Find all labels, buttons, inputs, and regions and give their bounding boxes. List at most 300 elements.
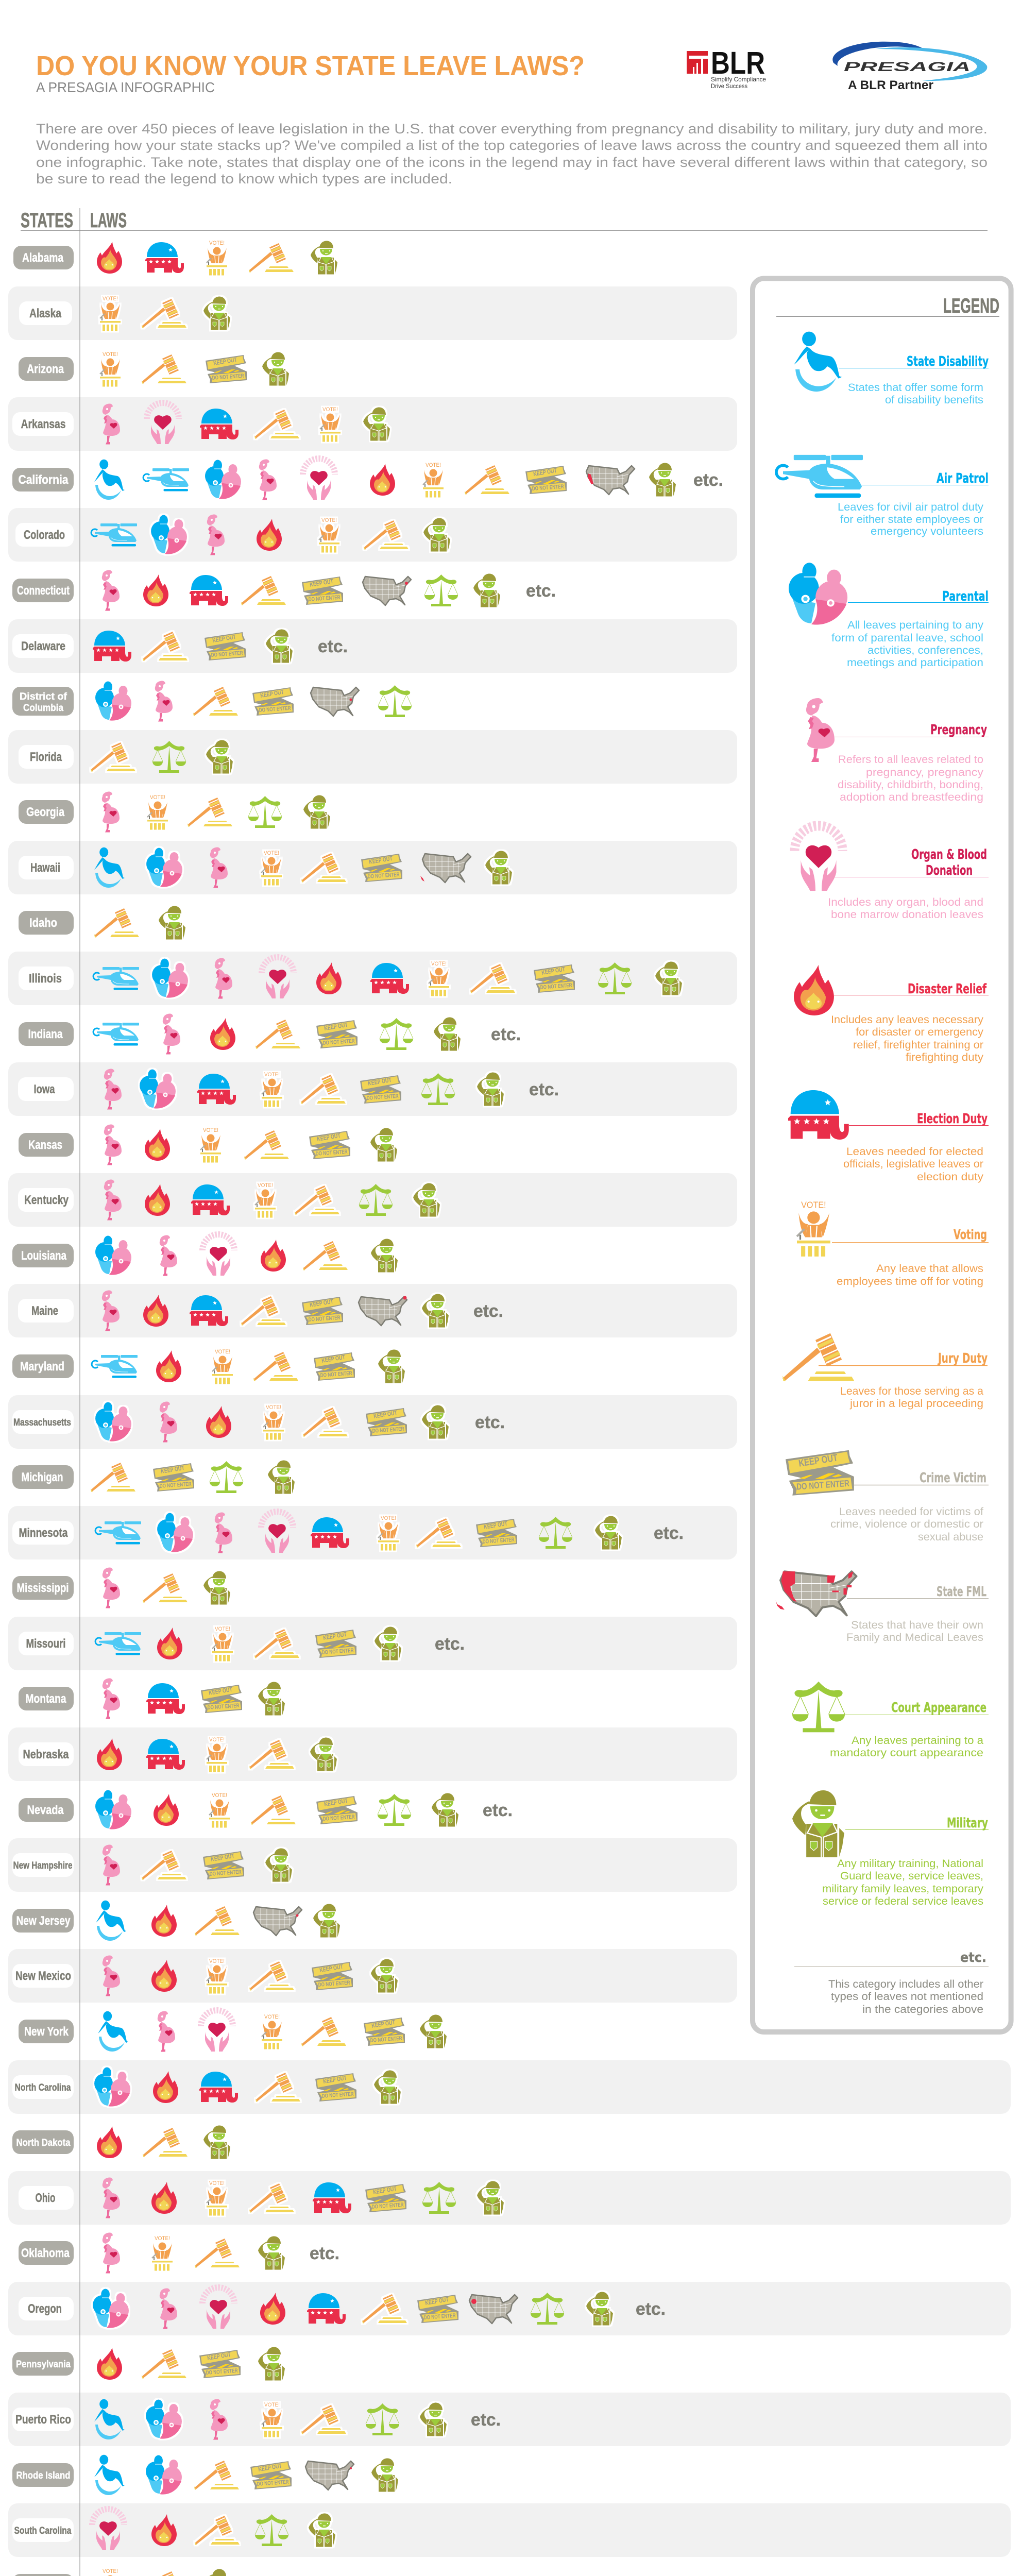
icon: parental xyxy=(146,2455,182,2495)
icon: state map xyxy=(305,2461,354,2490)
state label xyxy=(19,1798,74,1822)
state label xyxy=(18,1188,74,1212)
etc label: etc. xyxy=(318,637,348,656)
icon: voting xyxy=(100,296,121,331)
state label: North Dakota xyxy=(16,2138,71,2148)
row: Kentucky xyxy=(8,1173,737,1227)
state label: Missouri xyxy=(26,1637,66,1651)
icon: voting xyxy=(207,1737,227,1772)
description: types of leaves not mentioned xyxy=(831,1991,983,2003)
icon: military xyxy=(203,2126,230,2159)
icon: parental xyxy=(152,958,188,998)
icon: court xyxy=(422,2182,456,2214)
icon: jury xyxy=(91,1463,135,1492)
row: Oregon xyxy=(8,2282,1011,2335)
description: adoption and breastfeeding xyxy=(840,791,983,803)
icon: fire xyxy=(257,519,282,551)
state label xyxy=(12,2130,74,2154)
icon: crime xyxy=(250,2461,292,2489)
icon: fire xyxy=(151,2182,177,2214)
icon: fire xyxy=(261,1240,286,1272)
state label xyxy=(19,967,74,990)
icon: crime xyxy=(201,1685,242,1713)
state label xyxy=(19,357,74,381)
icon: jury xyxy=(142,2571,186,2576)
legend entry: Air Patrol xyxy=(776,455,989,537)
icon: military xyxy=(309,2513,335,2547)
state label: New Mexico xyxy=(15,1969,71,1983)
icon: jury xyxy=(143,1573,188,1602)
icon: military xyxy=(370,1128,397,1161)
state label: Oklahoma xyxy=(21,2246,70,2260)
icon: voting xyxy=(263,1404,284,1439)
icon: parental xyxy=(157,1513,193,1552)
description: for disaster or emergency xyxy=(856,1026,984,1038)
icon: military xyxy=(374,2070,401,2104)
state label: New Hampshire xyxy=(13,1860,72,1871)
icon: jury xyxy=(142,354,186,383)
state label: Minnesota xyxy=(19,1526,68,1540)
description xyxy=(830,1506,983,1543)
icon: voting xyxy=(423,462,444,498)
icon: military xyxy=(378,1350,405,1383)
description: Includes any leaves necessary xyxy=(831,1014,984,1026)
state label: Illinois xyxy=(29,972,62,986)
row: Delaware xyxy=(8,619,737,673)
state label xyxy=(12,1853,74,1877)
icon: military xyxy=(434,1017,461,1051)
icon: crime tape xyxy=(786,1450,854,1496)
icon: election xyxy=(199,2072,238,2103)
icon: air patrol xyxy=(143,468,189,492)
icon: crime xyxy=(365,2184,406,2212)
icon: crime xyxy=(302,1297,343,1325)
icon: voter at podium xyxy=(797,1199,830,1257)
intro paragraph: one infographic. Take note, states that display one of the icons in the legend may in fact have several different laws within that category, so xyxy=(36,155,988,170)
row: Hawaii xyxy=(8,841,737,894)
legend entry: Court Appearance xyxy=(792,1682,989,1759)
description: Guard leave, service leaves, xyxy=(840,1870,983,1882)
heading: State FML xyxy=(937,1584,986,1600)
state label: Alaska xyxy=(29,307,62,320)
state label xyxy=(12,1576,74,1600)
icon: pregnancy xyxy=(102,570,120,611)
icon: election xyxy=(145,242,184,273)
icon: pregnancy xyxy=(160,2289,177,2329)
description xyxy=(822,1858,984,1907)
icon: pregnancy xyxy=(160,1235,177,1276)
icon: military xyxy=(159,906,185,940)
icon: crime xyxy=(525,466,567,494)
icon: court xyxy=(378,685,412,717)
etc label: etc. xyxy=(483,1801,513,1820)
icon: military xyxy=(313,1904,340,1937)
icon: military xyxy=(473,574,500,607)
icon: disability xyxy=(98,2011,128,2052)
icon: pregnancy xyxy=(215,1513,232,1553)
row: Maryland xyxy=(12,1349,405,1384)
description: Leaves needed for elected xyxy=(846,1146,983,1158)
icon: fire xyxy=(370,464,395,496)
row: New Hampshire xyxy=(8,1838,737,1892)
icon: election xyxy=(191,1184,230,1215)
icon: parental xyxy=(95,681,131,721)
icon: parental xyxy=(95,1790,131,1829)
icon: military xyxy=(203,2569,230,2576)
description xyxy=(838,501,984,537)
icon: pregnancy xyxy=(102,791,120,833)
state label: Indiana xyxy=(28,1027,63,1041)
icon: heart in hands xyxy=(794,826,843,891)
description: employees time off for voting xyxy=(837,1276,983,1287)
row: Kansas xyxy=(19,1124,397,1165)
heading: Air Patrol xyxy=(937,471,989,486)
icon: US map xyxy=(776,1571,857,1616)
icon: election xyxy=(146,1683,185,1714)
icon: fire xyxy=(153,2071,178,2103)
description: meetings and participation xyxy=(847,657,983,669)
etc label: etc. xyxy=(471,2410,501,2430)
icon: military xyxy=(375,1627,401,1660)
row: South Dakota xyxy=(12,2568,287,2576)
icon: jury xyxy=(249,243,294,272)
state label xyxy=(19,800,74,824)
icon: crime xyxy=(199,2350,241,2378)
icon: state map xyxy=(586,466,635,495)
icon: military xyxy=(206,740,233,774)
state label: Kansas xyxy=(28,1138,62,1152)
icon: pregnancy xyxy=(158,2011,175,2052)
icon: court xyxy=(598,962,632,994)
state label xyxy=(12,1465,74,1489)
logo: Presagia: A BLR Partner xyxy=(848,78,933,92)
icon: pregnancy xyxy=(160,1401,177,1443)
icon: jury xyxy=(364,520,409,549)
description xyxy=(846,1619,983,1643)
icon: organ xyxy=(202,2287,234,2329)
icon: voting xyxy=(212,1626,233,1661)
icon: election xyxy=(313,2182,351,2213)
state label xyxy=(12,412,74,436)
icon: fire xyxy=(97,2126,122,2158)
description: Leaves for those serving as a xyxy=(840,1385,983,1397)
icon: voting xyxy=(320,406,341,442)
etc label: etc. xyxy=(693,470,723,490)
icon: pregnancy xyxy=(103,1567,120,1608)
icon: fire xyxy=(154,1794,179,1826)
description: officials, legislative leaves or xyxy=(843,1158,983,1170)
etc label: etc. xyxy=(636,2299,666,2319)
state label xyxy=(12,2352,74,2376)
icon: court xyxy=(359,1184,393,1216)
row: Arizona xyxy=(19,351,289,386)
icon: jury xyxy=(303,1408,348,1436)
icon: jury xyxy=(142,299,186,328)
intro paragraph xyxy=(36,121,988,187)
row: Missouri xyxy=(8,1617,737,1670)
state label: Mississippi xyxy=(16,1581,69,1595)
icon: military xyxy=(586,2292,613,2326)
icon: fire xyxy=(157,1628,182,1659)
icon: disability xyxy=(94,2399,125,2439)
row: Nebraska xyxy=(8,1727,737,1781)
icon: air patrol xyxy=(91,523,137,546)
state label xyxy=(12,1244,74,1267)
icon: court xyxy=(531,2293,564,2325)
description: pregnancy, pregnancy xyxy=(866,767,984,778)
legend entry: Parental xyxy=(789,563,989,669)
icon: election xyxy=(197,1074,236,1105)
description xyxy=(828,896,983,921)
state label xyxy=(19,856,74,879)
icon: voting xyxy=(261,850,282,885)
row: Colorado xyxy=(8,508,737,562)
state label xyxy=(19,2020,74,2043)
heading: Organ & Blood xyxy=(911,847,987,862)
icon: helicopter xyxy=(776,455,863,498)
icon: jury xyxy=(195,2239,240,2268)
state label: North Carolina xyxy=(14,2082,71,2093)
logo: Presagia: PRESAGIA xyxy=(844,60,971,74)
state label: Arizona xyxy=(27,362,64,376)
icon: jury xyxy=(254,1629,299,1658)
description: service or federal service leaves xyxy=(823,1895,983,1907)
heading: Jury Duty xyxy=(938,1351,988,1366)
icon: voting xyxy=(100,2568,121,2576)
row: District of Columbia xyxy=(12,681,412,721)
icon: military xyxy=(268,1460,295,1494)
state label xyxy=(12,2574,74,2576)
etc label: etc. xyxy=(310,2244,339,2263)
icon: court xyxy=(424,574,458,606)
row: Montana xyxy=(19,1679,285,1719)
legend entry: Military xyxy=(792,1790,989,1907)
state label xyxy=(19,2186,74,2210)
icon: parental xyxy=(95,1235,131,1275)
icon: military xyxy=(303,795,330,828)
icon: jury xyxy=(256,2073,300,2102)
description: Family and Medical Leaves xyxy=(846,1632,983,1643)
icon: voting xyxy=(200,1127,221,1162)
icon: jury xyxy=(301,853,346,882)
icon: organ xyxy=(261,1512,293,1553)
icon: court xyxy=(255,2514,288,2546)
heading: Disaster Relief xyxy=(908,981,986,997)
icon: jury xyxy=(256,1020,300,1049)
state label xyxy=(19,1742,74,1766)
icon: disability xyxy=(94,848,125,888)
state label: Puerto Rico xyxy=(15,2413,71,2427)
description: juror in a legal proceeding xyxy=(849,1398,983,1410)
icon: crime xyxy=(252,687,294,716)
state label: Oregon xyxy=(28,2302,62,2316)
icon: gavel xyxy=(782,1333,854,1381)
icon: voting xyxy=(319,517,339,552)
icon: military xyxy=(420,2014,447,2048)
icon: jury xyxy=(142,2349,186,2378)
icon: organ xyxy=(303,459,335,500)
state label xyxy=(12,2518,74,2542)
icon: crime xyxy=(534,964,575,993)
icon: jury xyxy=(416,1518,461,1548)
icon: military xyxy=(422,1294,449,1327)
icon: voting xyxy=(255,1182,276,1218)
icon: military xyxy=(371,1239,398,1273)
icon: crime xyxy=(302,577,343,605)
icon: air patrol xyxy=(93,1023,139,1046)
intro paragraph: There are over 450 pieces of leave legislation in the U.S. that cover everything from pregnancy and disability to military, jury duty and more. xyxy=(36,121,988,137)
icon: military xyxy=(266,630,293,663)
row: Alaska xyxy=(8,286,737,340)
row: South Carolina xyxy=(8,2503,1011,2557)
icon: state map xyxy=(253,1907,302,1936)
state label: Pennsylvania xyxy=(16,2359,71,2370)
row: Florida xyxy=(8,730,737,784)
state label: Louisiana xyxy=(21,1249,67,1263)
description: Any military training, National xyxy=(837,1858,983,1870)
icon: military xyxy=(311,241,337,274)
description: form of parental leave, school xyxy=(831,632,983,644)
row: Mississippi xyxy=(12,1567,230,1608)
row: Georgia xyxy=(19,791,330,833)
state label: Kentucky xyxy=(24,1193,69,1207)
icon: state map xyxy=(363,577,411,605)
icon: pregnancy xyxy=(104,1180,122,1220)
icon: jury xyxy=(465,465,509,495)
icon: pregnancy xyxy=(155,681,173,721)
icon: pregnancy xyxy=(104,1124,122,1165)
icon: jury xyxy=(254,410,299,439)
icon: pregnancy xyxy=(210,2399,228,2440)
state label xyxy=(12,2463,74,2487)
state label xyxy=(12,634,74,658)
icon: military xyxy=(477,1073,504,1106)
icon: pregnancy xyxy=(103,2233,120,2273)
icon: elephant xyxy=(788,1090,849,1140)
icon: parental xyxy=(94,2067,130,2107)
icon: voting xyxy=(207,2180,227,2215)
row: Connecticut xyxy=(12,570,556,611)
icon: soldier xyxy=(792,1790,844,1857)
heading: Pregnancy xyxy=(930,722,987,738)
state label: New Jersey xyxy=(16,1914,71,1928)
icon: jury xyxy=(301,2017,346,2046)
heading: Crime Victim xyxy=(920,1470,986,1486)
icon: parental xyxy=(205,460,241,499)
icon: military xyxy=(203,1571,230,1604)
legend entry: State Disability xyxy=(794,332,989,406)
icon: court xyxy=(210,1461,243,1493)
etc label: etc. xyxy=(475,1413,505,1432)
description xyxy=(831,1014,984,1063)
icon: jury xyxy=(94,908,139,938)
intro paragraph: Wondering how your state stacks up? We've compiled a list of the top categories of leave laws across the country and squeezed them all into xyxy=(36,138,988,153)
icon: disability xyxy=(96,1901,126,1941)
icon: election xyxy=(93,631,131,662)
icon: military xyxy=(422,1405,449,1438)
icon: crime xyxy=(203,1851,244,1879)
panel: legend xyxy=(753,278,1011,2032)
icon: pregnancy xyxy=(210,847,228,888)
icon: military xyxy=(203,297,230,330)
icon: military xyxy=(310,1737,337,1771)
icon: voting xyxy=(262,1072,282,1107)
description: relief, firefighter training or xyxy=(853,1039,983,1051)
column heading: laws: LAWS xyxy=(90,209,127,232)
state label xyxy=(12,1964,74,1988)
icon: crime xyxy=(366,1408,407,1436)
state label xyxy=(12,1410,74,1434)
state label: Connecticut xyxy=(17,584,70,598)
icon: crime xyxy=(206,355,247,383)
icon: jury xyxy=(303,1241,348,1270)
row: Oklahoma xyxy=(19,2233,339,2273)
state label xyxy=(12,1354,74,1378)
state label xyxy=(19,2297,74,2320)
icon: military xyxy=(423,518,450,551)
state label: Michigan xyxy=(22,1470,63,1484)
icon: court xyxy=(539,1517,572,1549)
description: of disability benefits xyxy=(885,394,983,406)
subtitle: A PRESAGIA INFOGRAPHIC xyxy=(36,79,215,95)
state label: Georgia xyxy=(26,805,65,819)
legend entry: Jury Duty xyxy=(782,1333,988,1410)
row: Arkansas xyxy=(8,397,737,451)
description xyxy=(828,1978,983,2015)
icon: jury xyxy=(362,2294,407,2324)
description: firefighting duty xyxy=(906,1052,984,1063)
icon: air patrol xyxy=(92,1355,138,1378)
icon: pregnant woman xyxy=(806,698,835,762)
state label xyxy=(19,1022,74,1046)
description: mandatory court appearance xyxy=(830,1747,983,1759)
icon: air patrol xyxy=(95,1632,141,1655)
icon: parental xyxy=(95,1402,131,1442)
state label xyxy=(18,1077,74,1101)
state label xyxy=(19,1133,74,1157)
description xyxy=(848,382,983,406)
icon: fire xyxy=(151,2514,177,2546)
state label xyxy=(12,2075,74,2099)
state label: Alabama xyxy=(22,251,64,265)
state label xyxy=(19,1687,74,1710)
icon: court xyxy=(421,1073,455,1105)
icon: disability xyxy=(94,2455,125,2495)
icon: fire xyxy=(210,1018,235,1050)
icon: military xyxy=(262,352,289,385)
icon: voting xyxy=(429,961,449,996)
icon: disability xyxy=(94,460,125,500)
description: Leaves needed for victims of xyxy=(839,1506,983,1518)
icon: crime xyxy=(361,854,402,882)
heading: etc. xyxy=(960,1950,986,1965)
icon: election xyxy=(311,1517,349,1548)
icon: organ xyxy=(92,2509,124,2550)
icon: fire xyxy=(143,574,168,606)
row: New Jersey xyxy=(12,1901,340,1941)
legend entry: Election Duty xyxy=(788,1090,989,1183)
icon: parental xyxy=(146,2400,182,2439)
legend entry: Crime Victim xyxy=(786,1450,989,1543)
icon: parents xyxy=(789,563,847,624)
legend entry: Disaster Relief xyxy=(794,965,989,1063)
heading: Voting xyxy=(954,1227,987,1243)
icon: voting xyxy=(152,2235,173,2271)
row: Indiana xyxy=(19,1014,521,1054)
row: Idaho xyxy=(19,906,185,940)
description xyxy=(831,619,984,669)
icon: fire xyxy=(143,1295,168,1327)
